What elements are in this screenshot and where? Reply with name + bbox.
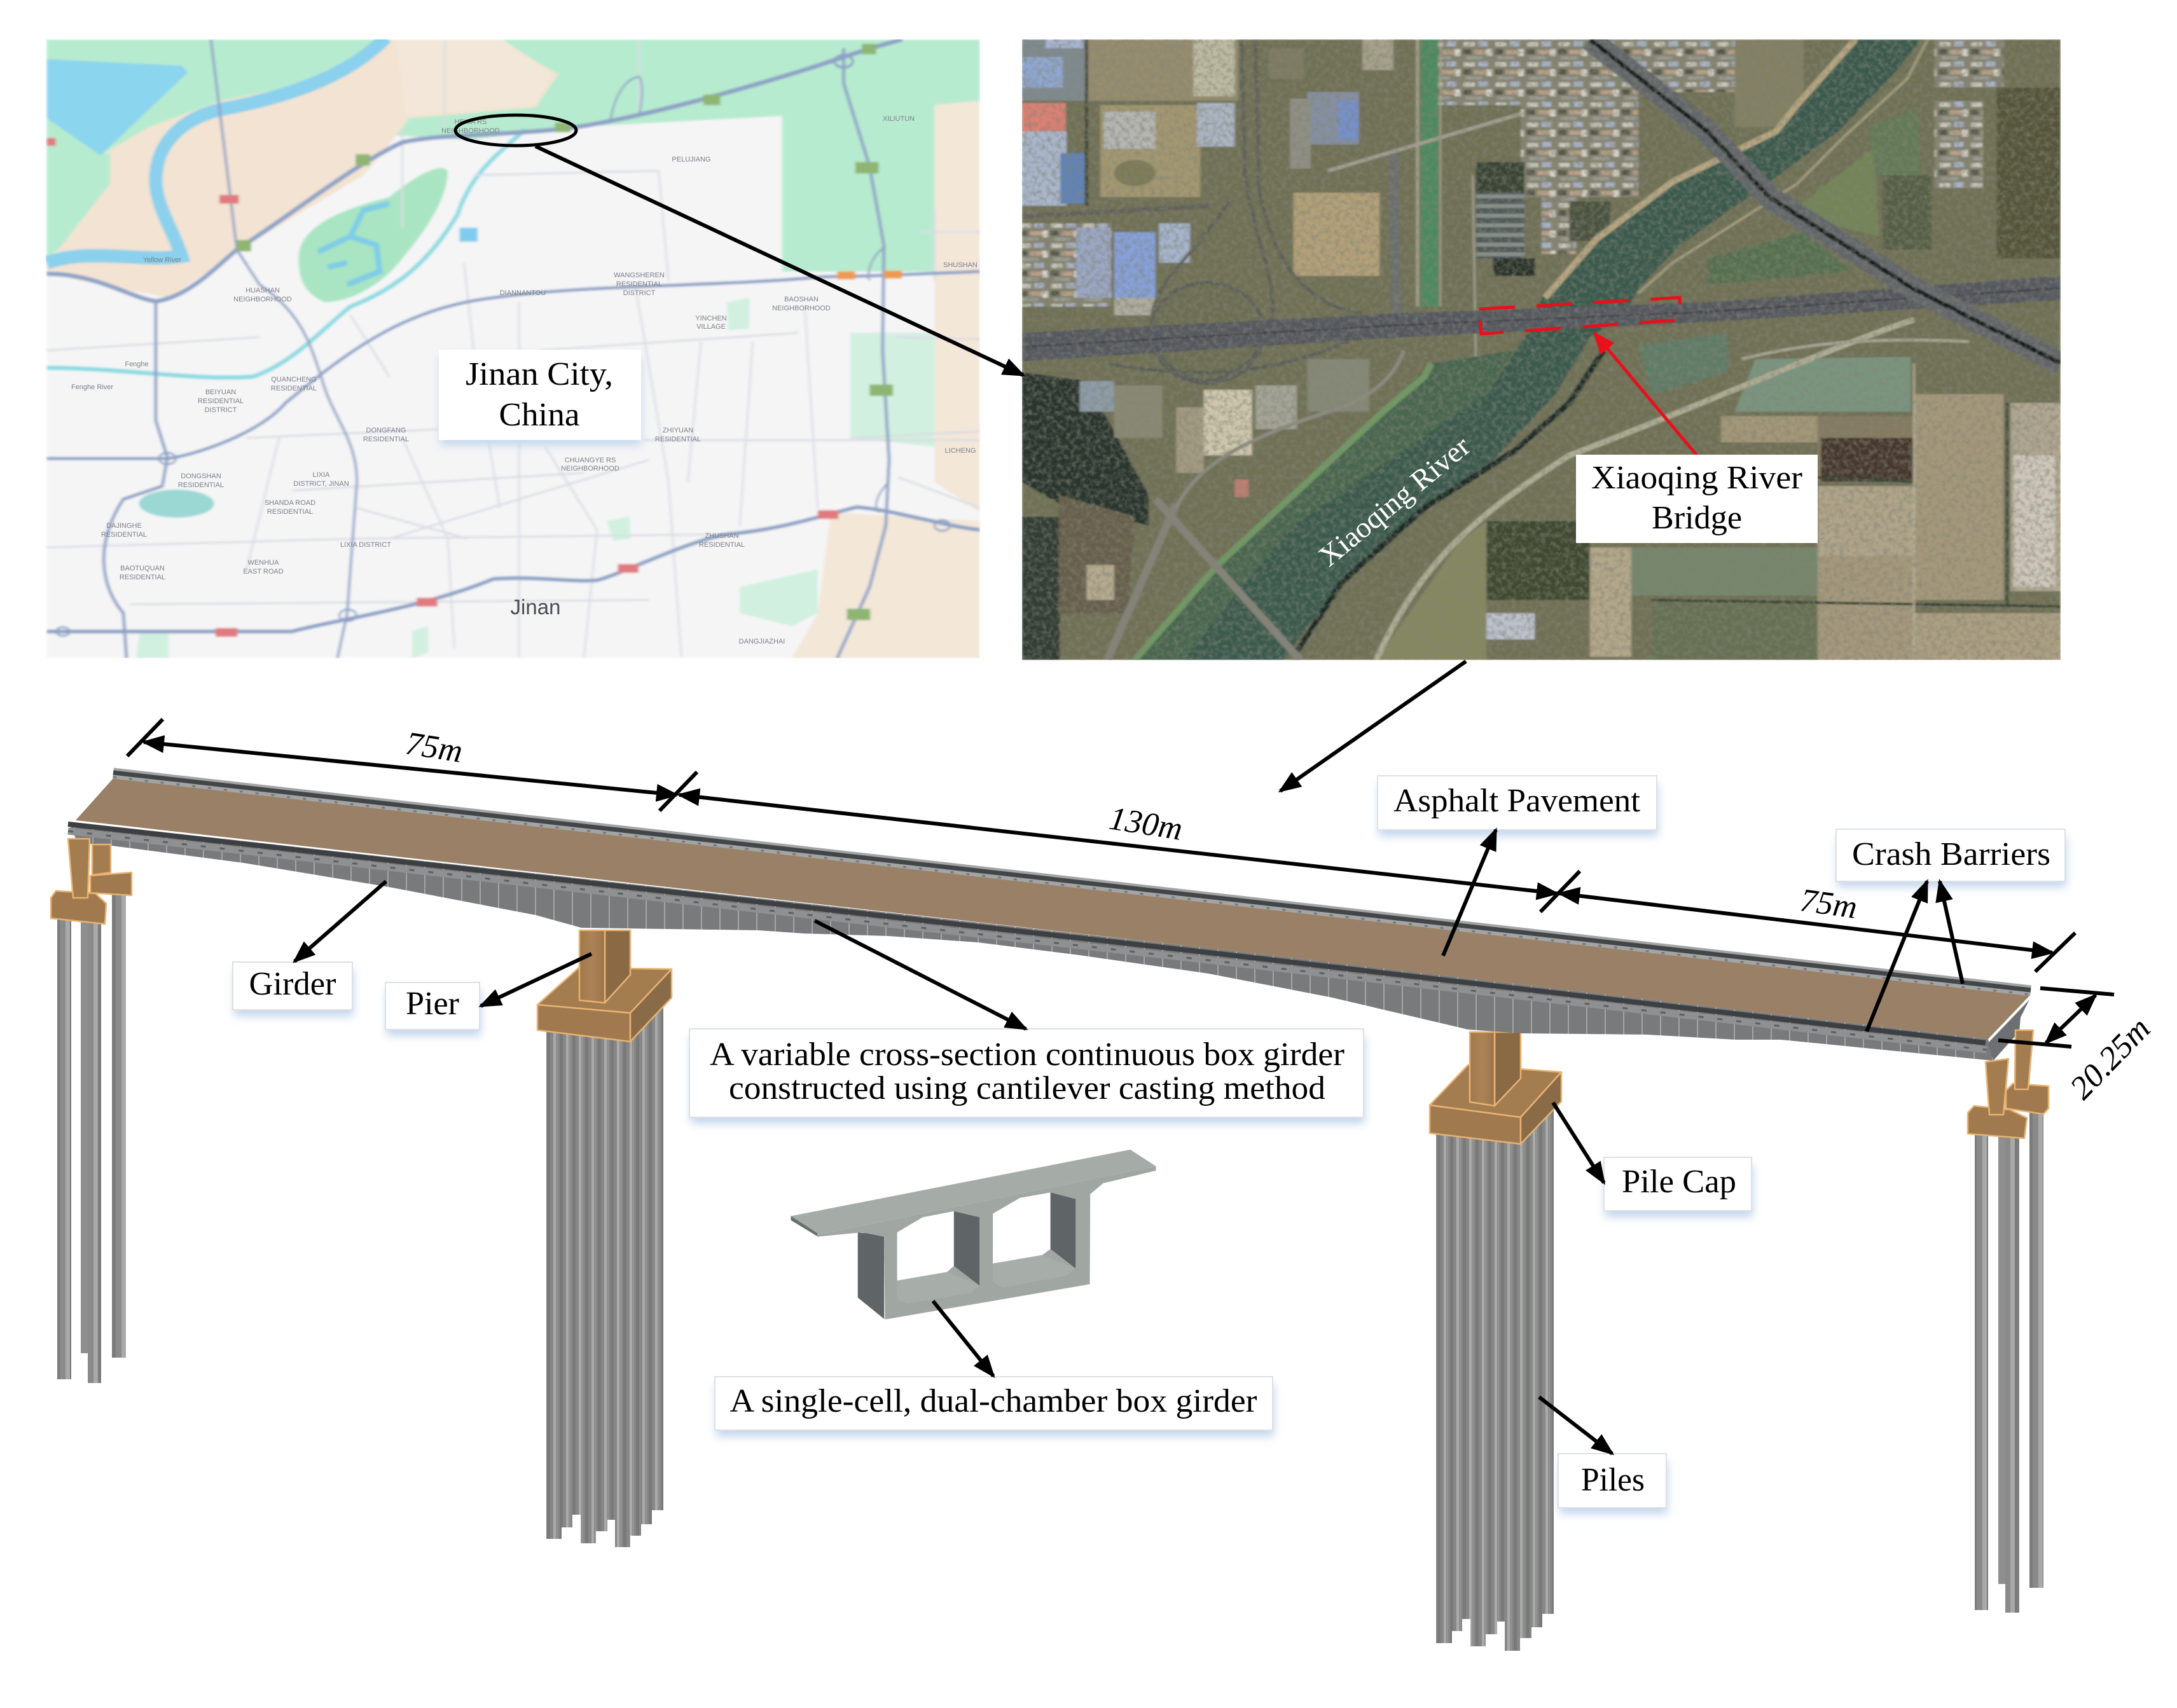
callout: Crash Barriers <box>1836 829 2066 887</box>
map labels: districts and neighborhoods: Fenghe River <box>71 383 113 391</box>
pier group 2: piles <box>1436 1094 1554 1651</box>
callout: Girder: Girder <box>249 966 336 1002</box>
callout: Jinan City, China: Jinan City, <box>466 356 613 392</box>
map labels: districts and neighborhoods: WENHUA <box>248 559 279 567</box>
dimension: first span 75m <box>127 719 697 811</box>
left abutment: piles <box>57 893 126 1383</box>
map labels: districts and neighborhoods: RESIDENTIAL <box>616 280 662 288</box>
river name label: Xiaoqing River <box>1312 429 1476 573</box>
map labels: districts and neighborhoods: HEXIA RS <box>455 118 487 126</box>
map labels: districts and neighborhoods: BAOTUQUAN <box>120 565 165 572</box>
map labels: districts and neighborhoods: RESIDENTIAL <box>267 508 313 516</box>
map labels: districts and neighborhoods: NEIGHBORHOOD <box>772 305 831 312</box>
panel: city map of Jinan <box>46 38 980 658</box>
callout: Xiaoqing River Bridge: Xiaoqing River <box>1591 460 1802 496</box>
pier group 1: piles <box>546 998 663 1547</box>
map labels: districts and neighborhoods: DISTRICT <box>623 289 656 297</box>
callout: Jinan City, China <box>439 350 641 445</box>
map place name: Jinan <box>511 595 560 619</box>
dimension: main span 130m <box>679 795 1580 912</box>
arrow: label to bridge location <box>1594 333 1697 455</box>
map labels: districts and neighborhoods: RESIDENTIAL <box>178 481 224 489</box>
map labels: districts and neighborhoods: YINCHEN <box>695 315 727 322</box>
deck: asphalt pavement <box>76 778 2029 1039</box>
callout: Piles: Piles <box>1581 1462 1645 1498</box>
arrow: crash barrier front <box>1867 881 1927 1031</box>
callout: Xiaoqing River Bridge <box>1576 455 1818 543</box>
right edge barrier (back) <box>113 773 2031 995</box>
callout: Piles <box>1558 1454 1668 1514</box>
map labels: districts and neighborhoods: NEIGHBORHOOD <box>561 465 619 472</box>
map labels: districts and neighborhoods: RESIDENTIAL <box>699 541 745 549</box>
panel: satellite image of bridge site <box>1022 39 2061 660</box>
arrow: pier <box>481 954 591 1006</box>
arrow: pile cap <box>1553 1103 1604 1183</box>
map labels: districts and neighborhoods: DONGSHAN <box>181 472 221 480</box>
map labels: districts and neighborhoods: RESIDENTIAL <box>101 531 147 539</box>
right abutment: pile caps and piers <box>1968 1030 2049 1138</box>
map labels: districts and neighborhoods: SHUSHAN <box>943 261 978 269</box>
map labels: districts and neighborhoods: BAOSHAN <box>784 296 819 303</box>
map labels: districts and neighborhoods: QUANCHENG <box>271 376 317 383</box>
map labels: districts and neighborhoods: DONGFANG <box>366 427 406 434</box>
dimension: main span 130m: 130m <box>1107 801 1185 848</box>
arrow: satellite image to bridge model <box>1280 661 1466 791</box>
right abutment: piles <box>1975 1106 2043 1613</box>
callout: Xiaoqing River Bridge: Bridge <box>1652 500 1742 536</box>
cross-section: single-cell dual-chamber box girder <box>791 1150 1156 1319</box>
arrow: piles <box>1539 1397 1612 1454</box>
callout: Pier <box>385 982 481 1036</box>
map labels: districts and neighborhoods: Fenghe <box>125 361 149 368</box>
map labels: districts and neighborhoods: RESIDENTIAL <box>198 397 244 405</box>
map labels: districts and neighborhoods: LICHENG <box>945 447 976 455</box>
map labels: districts and neighborhoods: NEIGHBORHOOD <box>233 296 292 303</box>
callout: Asphalt Pavement: Asphalt Pavement <box>1393 783 1641 819</box>
dimension: last span 75m <box>1559 882 2075 972</box>
map labels: districts and neighborhoods: EAST ROAD <box>243 568 284 575</box>
map labels: districts and neighborhoods: RESIDENTIAL <box>271 385 317 392</box>
map labels: districts and neighborhoods: ZHIYUAN <box>663 427 693 434</box>
map labels: districts and neighborhoods: RESIDENTIAL <box>363 436 409 443</box>
map labels: districts and neighborhoods: ZHUSHAN <box>705 532 739 540</box>
callout: Girder <box>233 962 354 1016</box>
pile cap 1 <box>537 968 672 1042</box>
callout: Pier: Pier <box>406 986 459 1022</box>
callout: Crash Barriers: Crash Barriers <box>1852 836 2050 872</box>
callout: Pile Cap: Pile Cap <box>1622 1164 1736 1200</box>
map labels: districts and neighborhoods: SHANDA ROAD <box>265 499 315 507</box>
pier shaft 2 <box>1470 1032 1521 1106</box>
bridge location marker: red dashed box <box>1479 298 1681 334</box>
callout: variable cross-section girder: constructed using cantilever casting method <box>729 1070 1325 1106</box>
map labels: districts and neighborhoods: DISTRICT <box>205 406 237 414</box>
girder end face <box>1988 1000 2029 1061</box>
dimension: last span 75m: 75m <box>1798 882 1860 926</box>
dimension: first span 75m: 75m <box>403 726 465 770</box>
left abutment: pile caps and piers <box>51 839 132 924</box>
dimension: deck width 20.25m <box>1998 988 2157 1106</box>
map labels: districts and neighborhoods: RESIDENTIAL <box>120 574 165 581</box>
arrow: variable girder <box>815 921 1026 1029</box>
map labels: districts and neighborhoods: LIXIA DISTRICT <box>340 541 391 549</box>
callout: single-cell dual-chamber box girder: A single-cell, dual-chamber box girder <box>730 1383 1257 1419</box>
map labels: districts and neighborhoods: VILLAGE <box>696 323 726 331</box>
map labels: districts and neighborhoods: XILIUTUN <box>883 115 915 123</box>
map labels: districts and neighborhoods: DIANNANTOU <box>500 289 546 297</box>
callout: variable cross-section girder: A variable cross-section continuous box girder <box>710 1037 1344 1073</box>
arrow: box section <box>933 1301 993 1376</box>
arrow: crash barrier back <box>1940 881 1963 984</box>
map marker: ellipse at bridge location <box>455 115 576 146</box>
map labels: districts and neighborhoods: NEIGHBORHOOD <box>441 127 500 135</box>
map labels: districts and neighborhoods: WANGSHEREN <box>614 272 665 279</box>
map labels: districts and neighborhoods: BEIYUAN <box>205 389 236 396</box>
callout: single-cell dual-chamber box girder <box>715 1377 1274 1436</box>
arrow: asphalt pavement <box>1443 830 1496 956</box>
map labels: districts and neighborhoods: PELUJIANG <box>672 156 711 163</box>
map labels: districts and neighborhoods: RESIDENTIAL <box>655 436 701 443</box>
map labels: districts and neighborhoods: DAJINGHE <box>106 522 142 530</box>
map labels: districts and neighborhoods: DANGJIAZHAI <box>739 638 785 645</box>
arrow: girder <box>294 881 386 961</box>
callout: Jinan City, China: China <box>499 397 580 433</box>
left edge barrier (front) <box>68 824 1987 1050</box>
arrow: map to satellite image <box>536 146 1023 375</box>
map labels: districts and neighborhoods: DISTRICT, JINAN <box>293 480 349 488</box>
map labels: districts and neighborhoods: Yellow River <box>143 256 181 264</box>
dimension: deck width 20.25m: 20.25m <box>2063 1010 2157 1106</box>
callout: Pile Cap <box>1604 1157 1753 1217</box>
map labels: districts and neighborhoods: CHUANGYE RS <box>565 457 616 464</box>
map labels: districts and neighborhoods <box>71 115 978 645</box>
pier shaft 1 <box>579 930 630 1003</box>
pile cap 2 <box>1430 1065 1561 1144</box>
girder: variable depth box <box>68 822 1993 1061</box>
bridge model <box>51 773 2049 1651</box>
map labels: districts and neighborhoods: LIXIA <box>313 471 330 479</box>
map labels: districts and neighborhoods: HUASHAN <box>245 287 280 294</box>
callout: Asphalt Pavement <box>1378 776 1658 836</box>
callout: variable cross-section girder <box>689 1029 1365 1124</box>
